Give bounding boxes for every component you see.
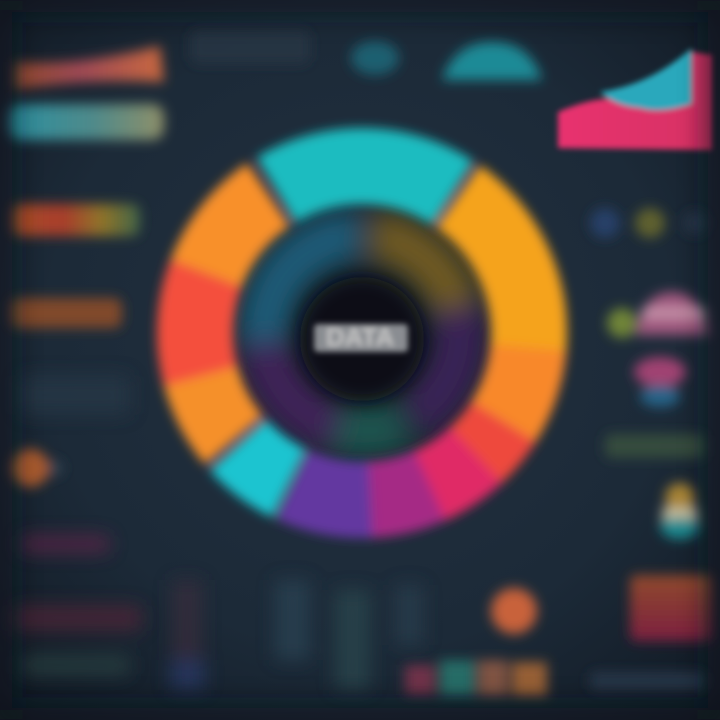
- chart: right red box: [630, 575, 712, 641]
- icon: left orange dot: [11, 449, 63, 487]
- panel: right side widgets: [590, 208, 712, 690]
- chart: centre hole: [300, 277, 424, 401]
- panel: bottom faded columns: [170, 580, 423, 690]
- text block: centre label: DATA: [326, 322, 394, 352]
- icon: right stack: [660, 483, 700, 539]
- chart: top right area chart: [558, 48, 712, 150]
- panel: top left bars: [8, 46, 164, 140]
- chart: right green bars: [605, 434, 705, 458]
- panel: top centre shapes: [190, 30, 542, 80]
- icon: bottom orange circle: [491, 588, 537, 634]
- icon: right dots: [590, 208, 707, 238]
- chart: outer coloured ring: [195, 166, 529, 500]
- chart: right pink dome: [607, 292, 710, 338]
- inner shadow disc: [232, 203, 492, 463]
- chart: bottom multicolour bars: [405, 660, 547, 696]
- chart: inner dim ring: [264, 235, 460, 431]
- panel: left bar widgets: [10, 204, 140, 328]
- chart: donut: [195, 166, 529, 500]
- text block: bottom right faded: [590, 672, 705, 690]
- panel: lower left faded lists: [12, 375, 142, 675]
- chart: right small stack: [634, 357, 686, 407]
